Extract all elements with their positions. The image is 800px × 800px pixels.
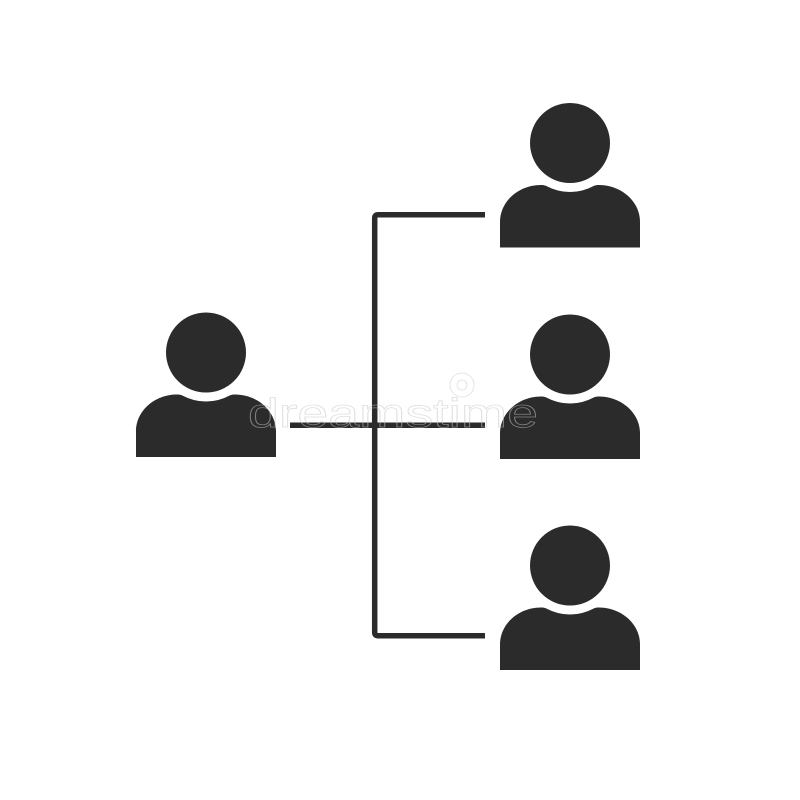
bracket: vertical trunk with top and bottom branches	[375, 215, 485, 636]
watermark	[248, 373, 538, 436]
icon: middle person	[500, 314, 640, 459]
connector lines	[290, 215, 485, 636]
icon: source person	[136, 312, 276, 457]
icon: bottom person	[500, 526, 640, 670]
line: from source person to branches	[290, 423, 485, 428]
watermark: dreamstime	[248, 390, 538, 436]
icon: top person	[500, 103, 640, 248]
